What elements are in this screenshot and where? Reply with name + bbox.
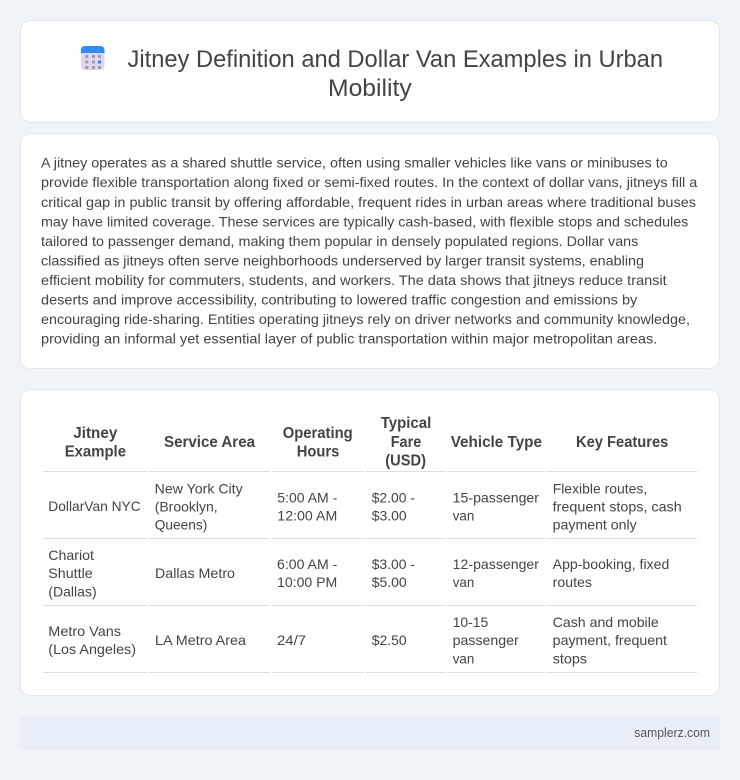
footer bar: samplerz.com bbox=[634, 725, 710, 740]
table row: Chariot Shuttle: $3.00 - bbox=[372, 556, 415, 572]
table header row: Fare bbox=[391, 434, 421, 451]
text block: description paragraph: A jitney operates as a shared shuttle service, often using smaller vehicles like vans or minibuses to bbox=[41, 155, 668, 171]
footer bar bbox=[20, 716, 720, 750]
table row: DollarVan NYC: Flexible routes, bbox=[553, 480, 647, 496]
table row: Chariot Shuttle: 10:00 PM bbox=[277, 574, 337, 590]
table row: Chariot Shuttle: $5.00 bbox=[372, 574, 407, 590]
table row: Metro Vans: Metro Vans bbox=[48, 623, 121, 639]
table row: DollarVan NYC: $3.00 bbox=[372, 508, 407, 524]
table row: DollarVan NYC: Queens) bbox=[155, 517, 207, 533]
table row: Metro Vans: payment, frequent bbox=[553, 632, 667, 648]
table row: Metro Vans: Cash and mobile bbox=[553, 614, 659, 630]
table row: Metro Vans: passenger bbox=[453, 632, 519, 648]
table row: Chariot Shuttle: routes bbox=[553, 574, 592, 590]
text block: description paragraph: may have limited coverage. These services are typically cash-based, with flexible stops and schedules bbox=[41, 213, 688, 229]
table header row: Example bbox=[65, 444, 126, 460]
table row: DollarVan NYC: DollarVan NYC bbox=[48, 498, 141, 514]
table row: DollarVan NYC: New York City bbox=[155, 480, 243, 496]
table header row: Key Features bbox=[576, 434, 668, 451]
text block: description paragraph: encouraging ride-sharing. Entities operating jitneys rely on driver networks and community knowledge, bbox=[41, 311, 690, 327]
table row: Metro Vans: $2.50 bbox=[372, 632, 407, 648]
table row: DollarVan NYC: payment only bbox=[553, 517, 637, 533]
table row: Chariot Shuttle: van bbox=[453, 574, 474, 590]
table header row: Vehicle Type bbox=[451, 434, 542, 451]
icon: calendar bbox=[81, 46, 104, 70]
table row: Metro Vans: (Los Angeles) bbox=[48, 641, 136, 657]
table row: Chariot Shuttle: App-booking, fixed bbox=[553, 556, 669, 572]
table row: Chariot Shuttle: Chariot bbox=[48, 547, 94, 563]
table row: Chariot Shuttle: 6:00 AM - bbox=[277, 556, 338, 572]
table header row: (USD) bbox=[385, 452, 426, 470]
panel: description bbox=[20, 134, 720, 368]
text block: description paragraph bbox=[41, 155, 698, 347]
table row: Metro Vans: van bbox=[453, 650, 474, 666]
table row: DollarVan NYC: 5:00 AM - bbox=[277, 489, 338, 505]
text block: description paragraph: critical gap in public transit by offering affordable, frequent rides in urban areas where traditional buses bbox=[41, 194, 696, 210]
panel: comparison table bbox=[20, 390, 720, 696]
table row: Metro Vans: stops bbox=[553, 650, 587, 666]
table row: DollarVan NYC: 15-passenger bbox=[453, 489, 539, 505]
table row: Chariot Shuttle: (Dallas) bbox=[48, 583, 97, 599]
title: Mobility bbox=[328, 75, 412, 102]
text block: description paragraph: efficient mobility for commuters, students, and workers. The data shows that jitneys reduce transit bbox=[41, 272, 667, 288]
text block: description paragraph: classified as jitneys often serve neighborhoods underserved by larger transit systems, enabling bbox=[41, 252, 644, 268]
table row: DollarVan NYC: $2.00 - bbox=[372, 489, 415, 505]
table row: Metro Vans bbox=[48, 614, 667, 666]
title bbox=[128, 46, 663, 102]
table header row: Jitney bbox=[73, 425, 117, 442]
table row: DollarVan NYC: frequent stops, cash bbox=[553, 498, 682, 514]
table row: Chariot Shuttle: Dallas Metro bbox=[155, 565, 235, 581]
table row: DollarVan NYC: van bbox=[453, 508, 474, 524]
table row: Chariot Shuttle: Shuttle bbox=[48, 565, 93, 581]
text block: description paragraph: deserts and improve accessibility, contributing to lowered traffic congestion and emissions by bbox=[41, 292, 637, 308]
title: Jitney Definition and Dollar Van Examples in Urban bbox=[128, 46, 663, 73]
text block: description paragraph: tailored to passenger demand, making them popular in densely populated regions. Dollar vans bbox=[41, 233, 638, 249]
table header row: Operating bbox=[283, 425, 353, 442]
panel: title header bbox=[20, 20, 720, 122]
table header row: Service Area bbox=[164, 434, 255, 451]
table header row: Hours bbox=[297, 444, 339, 460]
table row: Metro Vans: LA Metro Area bbox=[155, 632, 246, 648]
table row: Chariot Shuttle: 12-passenger bbox=[453, 556, 539, 572]
table header row: Typical bbox=[381, 415, 431, 432]
table row: Chariot Shuttle bbox=[48, 547, 669, 599]
table row: Metro Vans: 10-15 bbox=[453, 614, 489, 630]
table row: Metro Vans: 24/7 bbox=[277, 632, 306, 648]
table row: DollarVan NYC bbox=[48, 480, 682, 533]
table header row bbox=[65, 415, 668, 470]
text block: description paragraph: providing an informal yet essential layer of public transportation within major metropolitan areas. bbox=[41, 331, 657, 347]
table row: DollarVan NYC: (Brooklyn, bbox=[155, 498, 218, 514]
text block: description paragraph: provide flexible transportation along fixed or semi-fixed routes. In the context of dollar vans, jitneys fill a bbox=[41, 174, 698, 190]
table row: DollarVan NYC: 12:00 AM bbox=[277, 508, 337, 524]
